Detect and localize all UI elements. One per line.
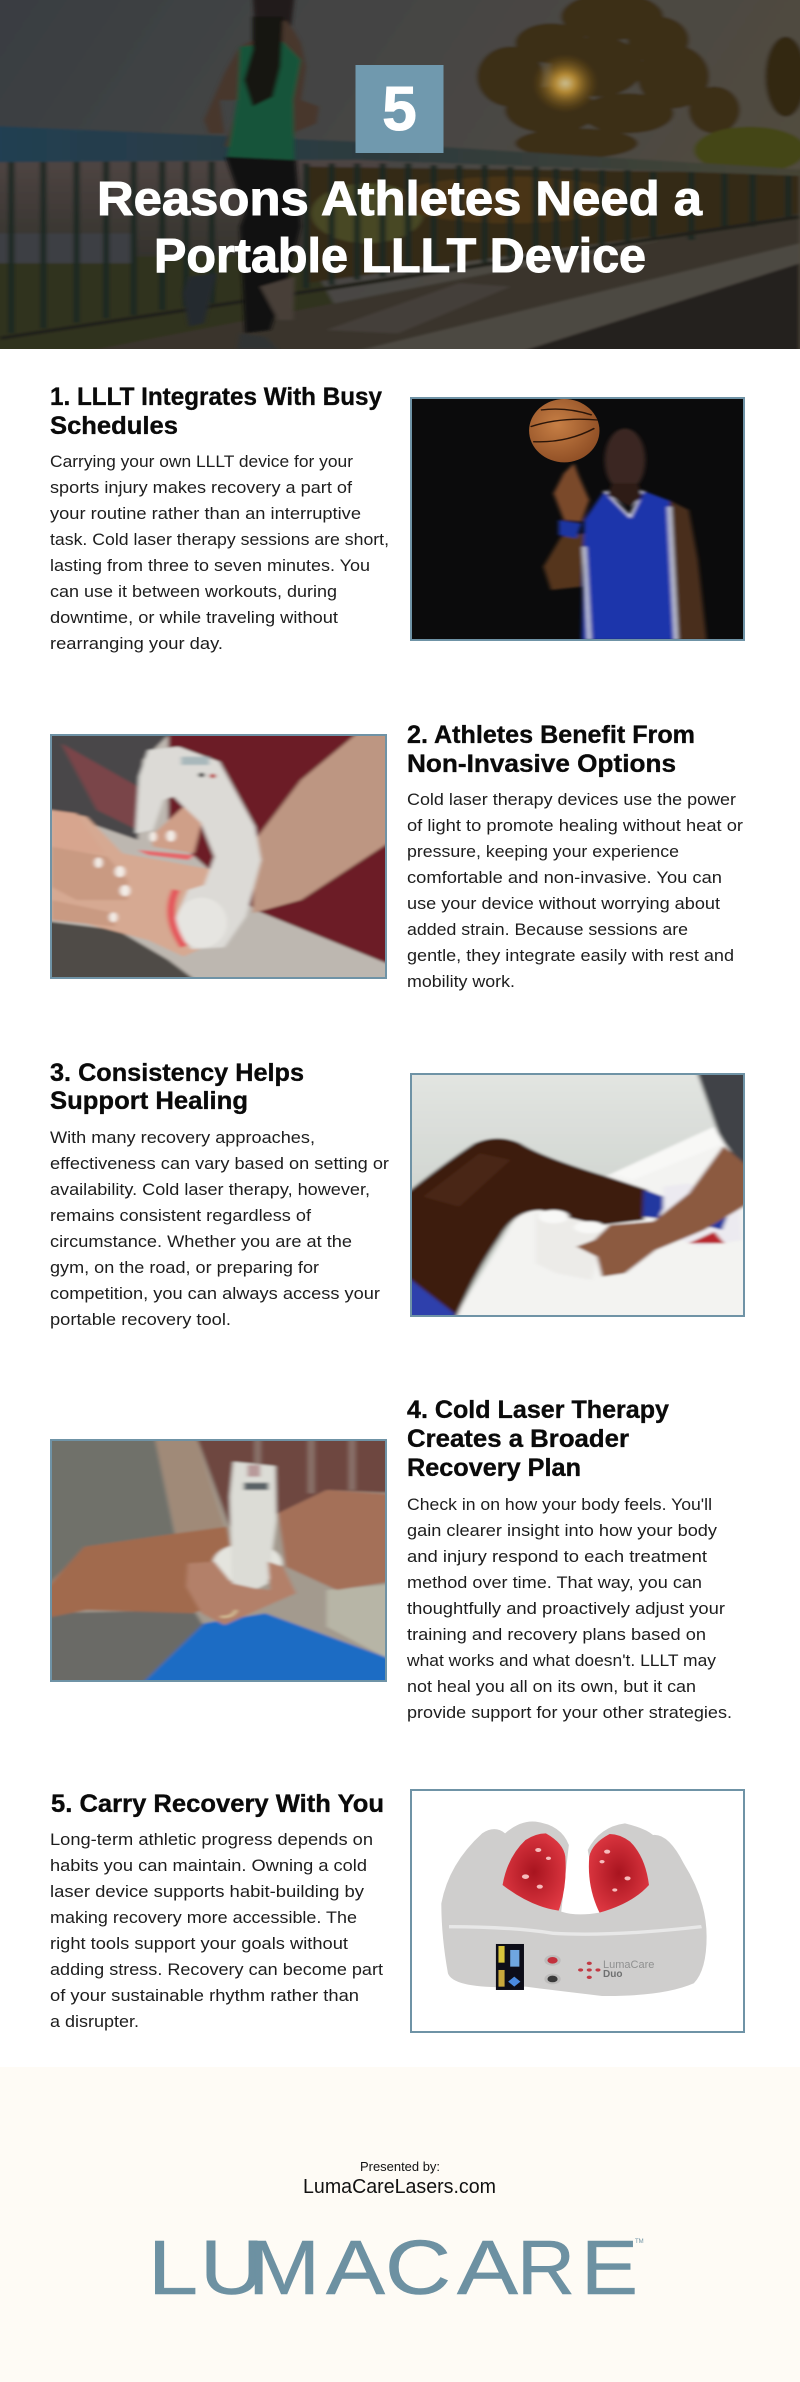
text block: reason 5: laser device supports habit-building by [50,1882,365,1901]
runner [183,0,319,349]
text block: reason 3: circumstance. Whether you are at the [50,1232,352,1251]
photo: device on forearm [50,1439,387,1682]
text block: reason 2: gentle, they integrate easily with rest and [407,946,734,965]
text block: reason 2: added strain. Because sessions are [407,920,688,939]
text block: reason 3: portable recovery tool. [50,1310,231,1329]
text block: reason 5: Long-term athletic progress depends on [50,1830,373,1849]
logo: LumaCare: C [385,2225,451,2311]
heading: reason 4: 4. Cold Laser Therapy [407,1396,669,1424]
text block: reason 4 [406,1495,732,1722]
text block: reason 5: right tools support your goals without [50,1934,348,1953]
title: Portable LLLT Device [154,230,646,283]
logo: LumaCare [148,2225,644,2311]
tree [477,0,800,158]
text block: reason 4: Check in on how your body feels. You'll [407,1495,712,1514]
text block: reason 2: Cold laser therapy devices use the power [407,790,736,809]
heading: reason 3: Support Healing [50,1087,248,1115]
panel: hero header [0,0,800,363]
photo: basketball player [410,397,745,641]
text block: reason 4: training and recovery plans based on [407,1625,706,1644]
heading: reason 3 [50,1059,304,1115]
text: presented by: Presented by: [360,2159,440,2174]
panel: footer [0,2067,800,2382]
text block: reason 1 [50,452,389,653]
text block: reason 4: and injury respond to each treatment [407,1547,707,1566]
photo: LumaCare Duo device: Duo [603,1969,622,1980]
text block: reason 2: comfortable and non-invasive. You can [407,868,722,887]
text block: reason 3: remains consistent regardless of [50,1206,311,1225]
heading: reason 2: Non-Invasive Options [407,750,676,778]
text block: reason 5: a disrupter. [50,2012,139,2031]
panel: reason 4 [36,1396,732,1722]
text block: reason 2: use your device without worrying about [407,894,720,913]
text block: reason 5: making recovery more accessible. The [50,1908,357,1927]
text block: reason 2: pressure, keeping your experience [407,842,679,861]
text block: reason 1: rearranging your day. [50,634,223,653]
photo: device on knee [410,1073,745,1317]
panel: reason 5 [50,1790,744,2032]
text block: reason 2: mobility work. [407,972,515,991]
text block: reason 1: Carrying your own LLLT device for your [50,452,353,471]
text block: reason 4: method over time. That way, you can [407,1573,702,1592]
text block: reason 4: gain clearer insight into how your body [407,1521,718,1540]
text block: reason 1: downtime, or while traveling without [50,608,338,627]
logo: LumaCare: U [200,2225,264,2311]
heading: reason 2: 2. Athletes Benefit From [407,721,695,749]
heading: reason 3: 3. Consistency Helps [50,1059,304,1087]
text: website: LumaCareLasers.com [303,2176,496,2198]
logo: LumaCare: E [581,2225,638,2311]
heading: reason 1: Schedules [50,412,178,440]
hero photo: runner at sunset [0,0,800,363]
panel: reason 3 [50,1059,760,1329]
logo: LumaCare: TM [635,2239,644,2245]
text block: reason 1: task. Cold laser therapy sessions are short, [50,530,389,549]
badge: number 5: 5 [382,75,417,144]
text block: reason 5: adding stress. Recovery can become part [50,1960,383,1979]
text block: reason 2: of light to promote healing without heat or [407,816,743,835]
heading: reason 1 [50,383,382,440]
photo: LumaCare Duo device: LumaCare [603,1959,654,1971]
text block: reason 4: what works and what doesn't. LLLT may [406,1651,717,1670]
photo: device on foot [50,734,387,979]
panel: reason 1 [50,383,755,653]
rail [0,125,800,177]
title: Reasons Athletes Need a [97,173,702,226]
text block: reason 4: not heal you all on its own, but it can [407,1677,696,1696]
text block: reason 5 [50,1830,383,2031]
logo: LumaCare: A [326,2225,386,2311]
title [97,173,702,283]
heading: reason 2 [407,721,695,778]
panel: reason 2 [36,721,743,991]
text block: reason 3: availability. Cold laser therapy, however, [50,1180,370,1199]
text block: reason 2 [407,790,743,991]
text block: reason 3: effectiveness can vary based on setting or [50,1154,389,1173]
text block: reason 5: of your sustainable rhythm rather than [50,1986,359,2005]
logo: LumaCare: L [148,2225,198,2311]
logo: LumaCare: R [517,2225,575,2311]
text block: reason 1: your routine rather than an interruptive [50,504,361,523]
text block: reason 4: thoughtfully and proactively adjust your [407,1599,725,1618]
walkway [77,213,800,353]
text block: reason 3: competition, you can always access your [50,1284,380,1303]
heading: reason 4: Creates a Broader [407,1425,629,1453]
fence balusters [11,162,788,333]
photo: LumaCare Duo device [411,1790,744,2032]
text block: reason 3: gym, on the road, or preparing for [50,1258,319,1277]
text block: reason 3: With many recovery approaches, [50,1128,315,1147]
heading: reason 4 [407,1396,669,1482]
text block: reason 5: habits you can maintain. Owning a cold [50,1856,367,1875]
text block: reason 1: lasting from three to seven minutes. You [50,556,370,575]
heading: reason 4: Recovery Plan [407,1454,581,1482]
text block: reason 1: sports injury makes recovery a part of [50,478,352,497]
logo: LumaCare: A [457,2225,519,2311]
heading: reason 5: 5. Carry Recovery With You [51,1790,384,1818]
heading: reason 1: 1. LLLT Integrates With Busy [50,383,382,411]
badge: number 5 [356,65,444,153]
text block: reason 1: can use it between workouts, during [50,582,337,601]
text block: reason 4: provide support for your other strategies. [407,1703,732,1722]
text block: reason 3 [50,1128,389,1329]
logo: LumaCare: M [248,2225,320,2311]
